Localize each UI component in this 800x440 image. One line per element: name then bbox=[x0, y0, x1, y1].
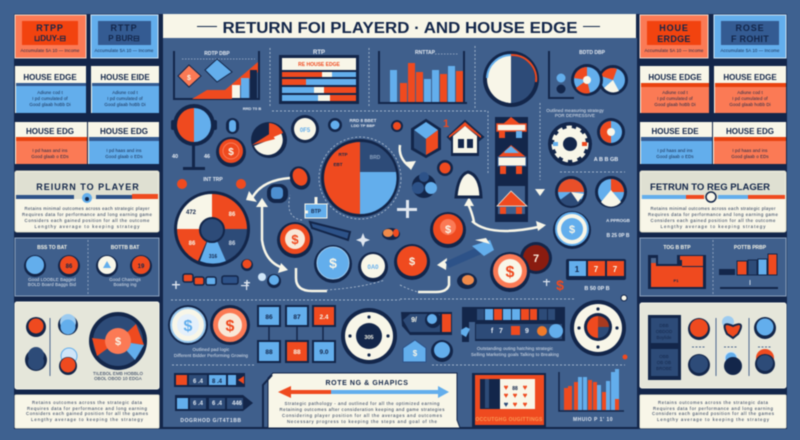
diagram: six boxes: 88 bbox=[265, 349, 273, 356]
panel: right chip grid bbox=[640, 303, 786, 388]
panel: right top blue tile bbox=[714, 15, 786, 58]
icon: orange coin bbox=[216, 137, 246, 167]
panel: bottom arrows: Strategic pathology - and outlined for all the optimized earning bbox=[284, 401, 440, 406]
icon: right dial bbox=[570, 300, 626, 356]
panel: hearts card: ♥ bbox=[523, 383, 528, 392]
chart: left wheel: INT TRP bbox=[203, 177, 223, 183]
icon: dark red seven chip bbox=[520, 242, 552, 274]
text block: bottom right: Retains outcomes across the strategic data bbox=[658, 400, 768, 405]
text block: bottom left: Considers each gained position for all the games bbox=[26, 411, 149, 416]
icon: blue coin: $ bbox=[329, 255, 337, 271]
panel: left chips: BSS TO BAT bbox=[37, 245, 67, 251]
chart: line rising bbox=[174, 51, 259, 99]
panel: return to player right: Lengthy average to keeping strategy bbox=[660, 224, 766, 229]
icon: blue house tag bbox=[403, 340, 426, 362]
panel: left top blue tile: Accumulate 5A 10 — Income bbox=[94, 48, 154, 53]
panel: left chip stacks and wheel: OBOL OBOD 10 EDGA bbox=[94, 376, 142, 381]
panel: right house edge left: Adiune cod t bbox=[662, 90, 688, 95]
panel: bottom arrows: Necessary progress to keeping the steps and goal of the bbox=[287, 419, 437, 424]
text block: bottom left: Requires data for performance and long earning bbox=[27, 406, 147, 411]
panel: right chip grid: BROBE bbox=[656, 366, 672, 371]
text block: bottom left: Lengthy average to keeping the strategy bbox=[31, 417, 144, 422]
label: A B B GB bbox=[594, 157, 618, 163]
icon: pentagon with chip bbox=[401, 312, 452, 335]
panel: left chip stacks and wheel bbox=[15, 302, 159, 389]
diagram: six boxes bbox=[258, 306, 335, 362]
panel: left top orange tile bbox=[15, 15, 86, 58]
text: right labels: B 25 0P B bbox=[607, 233, 630, 239]
panel: pill strip bbox=[461, 307, 565, 342]
panel: hearts card: ♥ bbox=[504, 383, 509, 392]
icon: blue box with label: BTP bbox=[311, 209, 322, 215]
chart: small pie bbox=[251, 122, 287, 158]
text block: bottom left bbox=[15, 395, 159, 428]
text: above gear: POR DEPRESSIVE bbox=[555, 113, 595, 118]
panel: return to player left: Requires data for performance and long earning game bbox=[22, 212, 152, 217]
chart: left wheel: 86 bbox=[229, 241, 236, 247]
panel: right top blue tile: Accumulate 5A 10 — Income bbox=[720, 48, 780, 53]
panel: left chips: BOLD Board Baggs Bid bbox=[28, 282, 77, 287]
panel: return to player right: Considers each gained position for all the outcome bbox=[650, 218, 776, 223]
panel: return to player right bbox=[640, 171, 786, 232]
panel: bottom arrows: Retaining outcomes after consideration keeping and game strategies bbox=[280, 407, 445, 412]
panel: house edge blue lower bbox=[88, 122, 159, 164]
icon: blue box with label bbox=[305, 197, 327, 218]
icon: left dial bbox=[341, 308, 397, 364]
panel: right house edge left: I pd cumulated of bbox=[657, 96, 693, 101]
dashed curves bbox=[289, 195, 418, 292]
text: strip caption bbox=[471, 346, 559, 357]
chart: big pie: BRD bbox=[370, 155, 381, 161]
panel: house edge blue lower: HOUSE EDG bbox=[100, 127, 148, 136]
diagram: six boxes: 88 bbox=[293, 349, 301, 356]
panel: hearts card: ♥ bbox=[523, 400, 528, 409]
panel: return to player right: Retains minimal outcomes across each strategic player bbox=[650, 206, 776, 211]
icon: pentagon with chip: 9/ bbox=[411, 317, 417, 324]
panel: left top blue tile bbox=[91, 15, 158, 58]
panel: return to player left: Retains minimal outcomes across each strategic player bbox=[24, 206, 150, 211]
icon: plus signs bbox=[172, 200, 550, 290]
panel: left chips: Boating ing bbox=[113, 282, 137, 287]
panel: small bars left: 6 .4 bbox=[193, 401, 204, 407]
icon: dark red seven chip: 7 bbox=[533, 253, 539, 265]
icon: cream coin bbox=[358, 252, 388, 282]
panel: small bars left bbox=[174, 373, 253, 424]
panel: left chips: Good Chasings bbox=[109, 277, 141, 282]
panel: left chips: BOTTB BAT bbox=[111, 245, 139, 251]
text block: bottom right: Considers each gained position for all the games bbox=[652, 411, 775, 416]
panel: small bars left: 446 bbox=[232, 401, 243, 407]
chart: left wheel bbox=[174, 177, 250, 267]
chart: big pie: EBT bbox=[334, 162, 343, 167]
panel: right charts bbox=[640, 238, 786, 296]
chart: stacked table: RTP bbox=[313, 50, 325, 56]
icon: blue knot bbox=[412, 172, 437, 198]
panel: hearts card: OCCUTGHG OUGITTINGS bbox=[475, 417, 543, 423]
panel: right chip grid: Boylide bbox=[656, 335, 672, 340]
panel: bottom arrows: Considering player position for all the averages and outcomes bbox=[282, 413, 443, 418]
icon: blue coin bbox=[314, 245, 352, 283]
panel: right house edge lower orange bbox=[713, 122, 786, 164]
icon: blue house tag: $ bbox=[413, 349, 418, 358]
panel: return to player left: REIURN TO PLAYER bbox=[36, 182, 140, 192]
chart: half pie bbox=[483, 51, 539, 107]
text: above gear bbox=[546, 108, 605, 118]
panel: right house edge right: Adiune cod t bbox=[737, 90, 763, 95]
panel: house edge blue left bbox=[15, 66, 86, 113]
panel: house edge blue right: HOUSE EIDE bbox=[100, 73, 150, 82]
panel: right top blue tile: F ROHIT bbox=[731, 34, 769, 44]
text block: bottom right: Requires data for performance and long earning bbox=[653, 406, 773, 411]
panel: pill strip: 7 bbox=[499, 328, 503, 335]
chart: bars: RNTTAP bbox=[415, 50, 436, 56]
icon: orange coin left: $ bbox=[409, 256, 415, 268]
chart: stacked table bbox=[279, 50, 359, 104]
panel: house edge blue right: Adiune cod t bbox=[112, 90, 138, 95]
chart: left wheel: 316 bbox=[209, 254, 217, 260]
panel: house edge orange bbox=[15, 122, 87, 164]
panel: right house edge right: Good glaab hoBb Di bbox=[729, 102, 771, 107]
icon: red mark: 1 bbox=[443, 118, 449, 130]
panel: hearts card: ♥ bbox=[513, 400, 518, 409]
chart: line rising: $ bbox=[187, 75, 191, 82]
title banner: RETURN FOI PLAYERD · AND HOUSE EDGE bbox=[222, 20, 578, 37]
panel: bottom arrows: ROTE NG & GHAPICS bbox=[326, 380, 408, 387]
text: chip caption bbox=[174, 347, 249, 358]
icon: orange chip row 3 bbox=[210, 305, 250, 345]
panel: house edge blue right: I pd cumulated of bbox=[107, 96, 143, 101]
boxes: 1 7 7 bbox=[566, 259, 626, 280]
panel: hearts card: ♥ bbox=[523, 391, 528, 400]
panel: right chip grid: DBB bbox=[659, 323, 669, 328]
icon: blue pill chips bbox=[258, 273, 281, 288]
arrow: left curve bbox=[252, 145, 543, 292]
chart: stacked table: RE HOUSE EDGE bbox=[298, 62, 340, 68]
chart: bottom bars: MHUIO P 1' 10 bbox=[573, 417, 613, 423]
icon: red white coin: $ bbox=[506, 264, 515, 281]
icon: orange dot bbox=[392, 121, 402, 131]
panel: right charts: TOG B BTP bbox=[663, 245, 691, 251]
arrow heads bbox=[246, 161, 546, 273]
panel: return to player right: FETRUN TO REG PLAGER bbox=[650, 182, 771, 192]
chart: twin mini pies: BDTD DBP bbox=[579, 50, 606, 56]
panel: house edge blue right bbox=[91, 66, 159, 113]
chart: orange pie bbox=[555, 176, 587, 208]
panel: centre background bbox=[163, 38, 637, 427]
panel: right top orange tile: HOUE bbox=[659, 23, 689, 33]
panel: left chips: Good LOOBLE Bagged bbox=[28, 277, 76, 282]
label ratio: RRD T0 B bbox=[243, 106, 261, 111]
icon: white ring: 0F5 bbox=[300, 128, 311, 134]
text: chip caption: Outlined pad logic bbox=[193, 347, 230, 352]
panel: right house edge lower blue: HOUSE EDE bbox=[651, 127, 699, 136]
panel: left top blue tile: P BUR⊟ bbox=[108, 34, 140, 43]
panel: right top orange tile: Accumulate 5A 10 — Income bbox=[644, 48, 704, 53]
icon: long dark pointer bbox=[310, 222, 350, 240]
panel: left top blue tile: RTTP bbox=[110, 23, 138, 33]
panel: left chips: 86 bbox=[66, 264, 73, 270]
panel: pill strip: f bbox=[491, 328, 494, 335]
chart: bottom bars bbox=[559, 369, 624, 423]
panel: right chip grid: OB OB bbox=[657, 360, 671, 365]
panel: small bars left: 8 .4 bbox=[212, 379, 223, 385]
panel: right house edge right: I pd cumulated of bbox=[732, 96, 768, 101]
panel: hearts card bbox=[472, 373, 546, 427]
icon: small pie right bbox=[597, 118, 625, 146]
panel: right charts: POTTB PRBP bbox=[734, 245, 767, 251]
icon: small orange dot bbox=[622, 354, 628, 360]
icon: small blue dot bbox=[328, 118, 342, 132]
panel: house edge blue lower: I pd haas and ins bbox=[106, 148, 142, 153]
panel: right top orange tile bbox=[640, 15, 708, 58]
text: strip caption: Selling Marketing goals Talking to Breaking bbox=[471, 352, 559, 357]
panel: right house edge left: Good glaab hoBb Di bbox=[654, 102, 696, 107]
panel: right charts: P1 bbox=[674, 278, 679, 283]
panel: right house edge left: HOUSE EDGE bbox=[648, 73, 702, 82]
icon: orange coin top bbox=[430, 212, 466, 248]
icon: orange coin left bbox=[394, 244, 430, 280]
panel: house edge blue left: I pd cumulated of bbox=[32, 96, 68, 101]
text: right labels bbox=[606, 218, 631, 239]
panel: pill strip: 9 bbox=[525, 328, 529, 335]
text: right labels: A PPROGB bbox=[606, 218, 631, 223]
panel: house column bbox=[495, 117, 528, 222]
title banner bbox=[163, 14, 636, 38]
icon: blue chips bbox=[431, 340, 453, 362]
panel: house edge blue left: Good glaab hoBb Di bbox=[29, 102, 71, 107]
icon: orange chip row 3: $ bbox=[226, 318, 235, 335]
label ratio: RRD 8 BBET bbox=[349, 118, 377, 123]
icon: cube bbox=[412, 120, 440, 157]
panel: right top orange tile: ERDGE bbox=[657, 34, 691, 44]
text block: bottom right bbox=[640, 395, 786, 428]
panel: hearts card: 88 bbox=[512, 386, 518, 392]
red dollar: $ bbox=[556, 277, 564, 293]
icon: house bbox=[448, 121, 483, 155]
panel: bottom arrows bbox=[263, 373, 460, 428]
panel: house edge orange: HOUSE EDG bbox=[26, 127, 74, 136]
panel: right house edge lower blue bbox=[640, 122, 712, 164]
panel: return to player left: Considers each gained position for all the outcome bbox=[24, 218, 150, 223]
icon: blue chip row 3: $ bbox=[184, 318, 193, 335]
icon: orange coin top: $ bbox=[445, 224, 451, 236]
boxes: 1 7 7: 7 bbox=[594, 265, 599, 274]
text block: bottom left: Retains outcomes across the strategic data bbox=[32, 400, 142, 405]
panel: house edge blue lower: Good glaab o EDs bbox=[105, 154, 143, 159]
panel: right house edge right: HOUSE EDGE bbox=[723, 73, 777, 82]
icon: orange coin: $ bbox=[228, 147, 234, 158]
panel: house edge blue right: Good glaab hoBb Di bbox=[104, 102, 146, 107]
panel: house edge orange: I pd haas and ins bbox=[32, 148, 68, 153]
chart: line rising: RDTP DBP bbox=[204, 51, 230, 57]
panel: right chip grid: OBDOD bbox=[656, 329, 672, 334]
label ratio bbox=[243, 106, 377, 128]
panel: hearts card: ♥ bbox=[504, 391, 509, 400]
label 46: 46 bbox=[204, 154, 210, 160]
panel: right house edge lower blue: Good glaab o EDs bbox=[656, 154, 694, 159]
panel: left chips: 19 bbox=[138, 264, 145, 270]
panel: right house edge lower orange: I pd haas and ins bbox=[732, 148, 768, 153]
panel: right house edge lower orange: Good glaab o EDs bbox=[731, 154, 769, 159]
icon: small blue chips bbox=[183, 259, 253, 285]
panel: small bars left: 6 .4 bbox=[212, 401, 223, 407]
arrow: down small bbox=[535, 189, 545, 196]
panel: left chips bbox=[15, 238, 159, 296]
panel: right house edge lower blue: I pd haas and ins bbox=[657, 148, 693, 153]
icon: keyhole stand bbox=[171, 104, 217, 170]
icon: coin blue large bbox=[553, 211, 591, 249]
diagram: six boxes: 9.0 bbox=[319, 349, 329, 356]
icon: red white coin bbox=[490, 252, 530, 292]
panel: right top blue tile: ROSE bbox=[735, 23, 765, 33]
chart: left wheel: 86 bbox=[229, 212, 236, 218]
icon: white helmet bbox=[456, 172, 481, 197]
chart: bars bbox=[379, 50, 467, 103]
chart: left wheel: 472 bbox=[186, 210, 197, 216]
icon: white ring bbox=[291, 115, 319, 143]
icon: left dial: 305 bbox=[364, 335, 374, 341]
panel: small bars left: 6 .4 bbox=[193, 379, 204, 385]
icon: orange small coin bbox=[437, 160, 453, 176]
panel: right house edge right bbox=[714, 66, 786, 113]
panel: hearts card: ♥ bbox=[504, 400, 509, 409]
boxes: 1 7 7: 1 bbox=[575, 265, 580, 274]
icon: dice pill bbox=[267, 184, 288, 203]
icon: orange bullseye coin bbox=[277, 222, 313, 258]
panel: hearts card: ♥ bbox=[513, 391, 518, 400]
chart: blue pie bbox=[595, 176, 627, 208]
chart: twin mini pies bbox=[549, 50, 628, 98]
icon: gear bbox=[548, 122, 592, 166]
icon: coin blue large: $ bbox=[569, 224, 575, 236]
diagram: six boxes: 87 bbox=[293, 314, 301, 321]
arrow: diagonal blue bbox=[445, 238, 494, 268]
panel: small bars left: DOGRHOD G/T4T1BB bbox=[180, 418, 242, 424]
chart: big pie bbox=[319, 137, 401, 219]
text: chip caption: Different Bidder Performing Growing bbox=[174, 353, 249, 358]
panel: left chip stacks and wheel: $ bbox=[115, 336, 121, 348]
chart: big pie: RTP bbox=[338, 152, 348, 157]
icon: orange bullseye coin: $ bbox=[291, 232, 299, 247]
panel: house edge blue left: Adiune cod t bbox=[37, 90, 63, 95]
icon: small white ring bbox=[621, 295, 627, 301]
panel: left top orange tile: RTPP bbox=[36, 23, 64, 33]
label: B 50 0P B bbox=[584, 286, 610, 292]
boxes: 1 7 7: 7 bbox=[613, 265, 618, 274]
icon: cream coin: 0A0 bbox=[367, 265, 379, 271]
label ratio: LDD TP BBP bbox=[351, 123, 375, 128]
panel: right house edge left bbox=[640, 66, 709, 113]
panel: return to player left: Lengthy average to keeping strategy bbox=[34, 224, 140, 229]
icon: red bean bbox=[286, 163, 314, 193]
icon: blue chip row 3 bbox=[168, 305, 208, 345]
diagram: six boxes: 86 bbox=[265, 314, 273, 321]
panel: left top orange tile: Accumulate 5A 10 — Income bbox=[20, 48, 80, 53]
text: strip caption: Outstanding outing hatching strategic bbox=[477, 346, 554, 351]
text: above gear: Outlined measuring strategy bbox=[546, 108, 605, 113]
diagram: six boxes: 2.4 bbox=[319, 314, 329, 321]
icon: blue pill bbox=[226, 118, 239, 134]
icon: bean small bbox=[382, 228, 400, 240]
panel: house edge orange: Good glaab o EDs bbox=[31, 154, 69, 159]
panel: right chip grid: OBB bbox=[659, 354, 669, 359]
label 40: 40 bbox=[172, 154, 178, 160]
text block: bottom right: Lengthy average to keeping the strategy bbox=[657, 417, 770, 422]
panel: left chip stacks and wheel: TILEBOL EMB HOBBLO bbox=[93, 371, 143, 376]
icon: small bean coin bbox=[457, 273, 477, 289]
panel: house edge blue left: HOUSE EDGE bbox=[23, 73, 77, 82]
chart: left wheel: 86 bbox=[189, 241, 196, 247]
panel: right house edge lower orange: HOUSE EDG bbox=[726, 127, 774, 136]
panel: return to player right: Requires data for performance and long earning game bbox=[648, 212, 778, 217]
dashed dividers bbox=[171, 46, 625, 365]
panel: left top orange tile: ⊔DUY-⊟ bbox=[34, 34, 66, 43]
panel: return to player left bbox=[15, 171, 159, 232]
